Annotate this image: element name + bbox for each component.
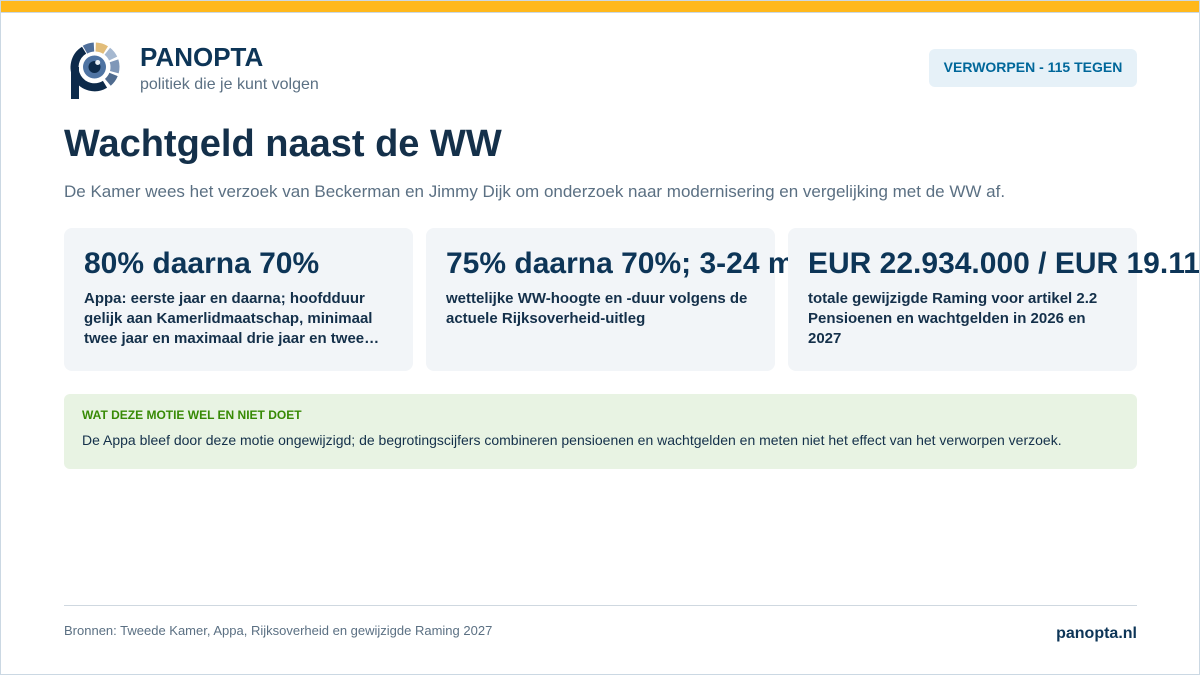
logo	[70, 42, 120, 99]
stat card 1: Appa: eerste jaar en daarna; hoofdduur gelijk aan Kamerlidmaatschap, minimaal twee jaar en maximaal drie jaar en twee…	[84, 290, 379, 347]
stat card 3	[788, 228, 1137, 371]
status badge	[929, 49, 1137, 87]
stat card 1: 80% daarna 70%	[84, 247, 319, 280]
status badge: VERWORPEN - 115 TEGEN	[944, 59, 1122, 75]
stat card 1	[64, 228, 413, 371]
title: Wachtgeld naast de WW	[64, 123, 502, 165]
brand tagline: politiek die je kunt volgen	[140, 76, 319, 93]
sources: Bronnen: Tweede Kamer, Appa, Rijksoverheid en gewijzigde Raming 2027	[64, 623, 492, 638]
callout heading: WAT DEZE MOTIE WEL EN NIET DOET	[82, 408, 302, 422]
stat card 2: 75% daarna 70%; 3-24 maanden	[446, 247, 900, 280]
callout	[64, 394, 1137, 469]
stat card 2: wettelijke WW-hoogte en -duur volgens de actuele Rijksoverheid-uitleg	[446, 290, 747, 327]
stat card 3: totale gewijzigde Raming voor artikel 2.2 Pensioenen en wachtgelden in 2026 en 2027	[808, 290, 1097, 347]
top accent bar	[0, 0, 1200, 13]
brand name: PANOPTA	[140, 42, 263, 72]
site link: panopta.nl	[1056, 625, 1137, 642]
subtitle: De Kamer wees het verzoek van Beckerman en Jimmy Dijk om onderzoek naar modernisering en vergelijking met de WW af.	[64, 182, 1005, 201]
callout text: De Appa bleef door deze motie ongewijzigd; de begrotingscijfers combineren pensioenen en wachtgelden en meten niet het effect van het verworpen verzoek.	[82, 432, 1062, 448]
stat card 2	[426, 228, 775, 371]
